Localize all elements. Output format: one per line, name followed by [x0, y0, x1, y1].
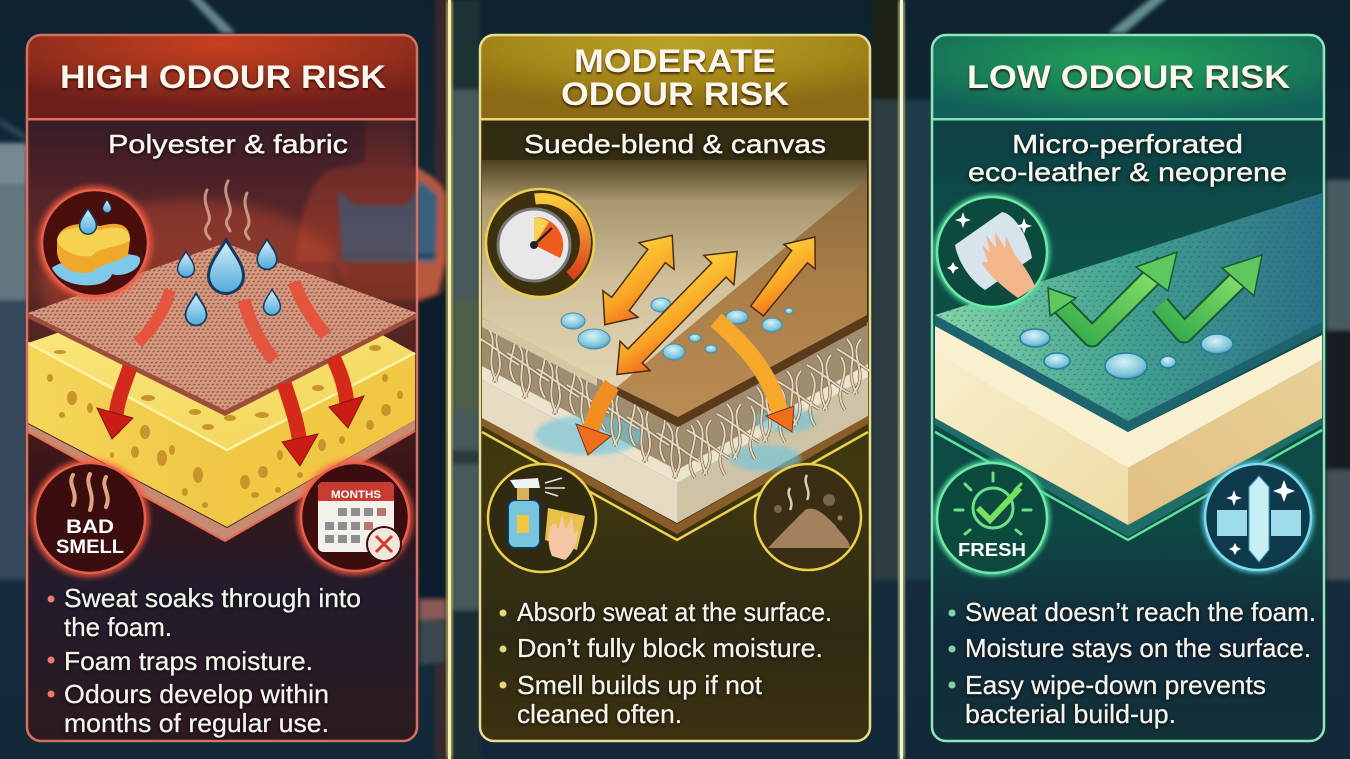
icon: fresh: [936, 462, 1048, 574]
bullets: Easy wipe-down prevents: [965, 670, 1266, 700]
bullets: Absorb sweat at the surface.: [517, 597, 832, 627]
heading: MODERATE: [574, 43, 776, 79]
top sheet tan: [482, 318, 597, 386]
top sheet brown: [617, 315, 867, 427]
bullets: Odours develop within: [64, 679, 329, 709]
icon: spray and wipe: [488, 464, 596, 572]
icon: moisture barrier: [1204, 463, 1312, 571]
bullets: Don’t fully block moisture.: [517, 633, 823, 663]
bullets: [48, 583, 361, 738]
panel body and header fill: [27, 35, 438, 360]
icon: gauge timer: [486, 189, 594, 297]
layered material diagram: [477, 160, 879, 540]
panel: high odour risk: [27, 35, 438, 741]
heading: ODOUR RISK: [561, 76, 789, 112]
icon: bad smell: [34, 462, 146, 574]
droplets: [561, 298, 793, 360]
heading: LOW ODOUR RISK: [967, 59, 1290, 95]
icon: dirt build-up: [755, 464, 861, 570]
icon: bad smell: BAD: [66, 517, 114, 538]
icon: wet sponge: [41, 189, 149, 297]
base and foam: [482, 432, 868, 540]
heading: [561, 43, 789, 112]
icon: fresh: FRESH: [958, 540, 1026, 560]
orange arrows: [602, 234, 816, 376]
bullets: [948, 597, 1316, 729]
steam lines: [205, 181, 249, 239]
foam block: [28, 332, 415, 541]
bullets: Moisture stays on the surface.: [965, 633, 1311, 663]
bullets: Foam traps moisture.: [64, 646, 313, 676]
woman athlete silhouette: [296, 95, 447, 665]
subheading: Polyester & fabric: [108, 129, 348, 159]
fibre layer backing: [482, 322, 868, 483]
icon: months calendar: [300, 462, 410, 572]
heading: HIGH ODOUR RISK: [60, 59, 386, 95]
perforated fabric sheet: [28, 243, 417, 416]
divider: green glowing line: [899, 0, 904, 759]
header band: [480, 35, 870, 120]
header band: [932, 35, 1324, 120]
moisture pools: [535, 408, 817, 471]
bullets: Smell builds up if not: [517, 670, 763, 700]
bullets: cleaned often.: [517, 699, 682, 729]
subheading: Suede-blend & canvas: [524, 129, 826, 159]
divider: gold glowing line: [447, 0, 452, 759]
bullets: [500, 597, 832, 729]
icon: months calendar: MONTHS: [331, 489, 381, 501]
red arrows through foam: [97, 282, 364, 466]
bullets: Sweat doesn’t reach the foam.: [965, 597, 1316, 627]
tank top showing through panel: [336, 186, 416, 264]
green check arrows: [1058, 264, 1250, 337]
ceiling light streaks: [0, 0, 1170, 142]
sweat drops: [178, 239, 280, 326]
water droplets: [1020, 329, 1233, 379]
layered eco-leather diagram: [935, 193, 1322, 540]
subheading: eco-leather & neoprene: [968, 157, 1287, 187]
bullets: bacterial build-up.: [965, 699, 1176, 729]
bullets: Sweat soaks through into: [64, 583, 361, 613]
bullets: months of regular use.: [64, 708, 329, 738]
fibres: [477, 327, 879, 478]
subheading: [968, 129, 1287, 187]
subheading: Micro-perforated: [1012, 129, 1243, 159]
icon: bad smell: SMELL: [56, 537, 124, 558]
bullets: the foam.: [64, 612, 172, 642]
foam top band: [482, 364, 868, 483]
foam holes: [47, 345, 403, 508]
eco-leather top sheet: [935, 315, 1322, 432]
panel: low odour risk: [932, 35, 1324, 741]
panel: moderate odour risk: [477, 35, 879, 741]
icon: wipe clean: [936, 196, 1048, 308]
